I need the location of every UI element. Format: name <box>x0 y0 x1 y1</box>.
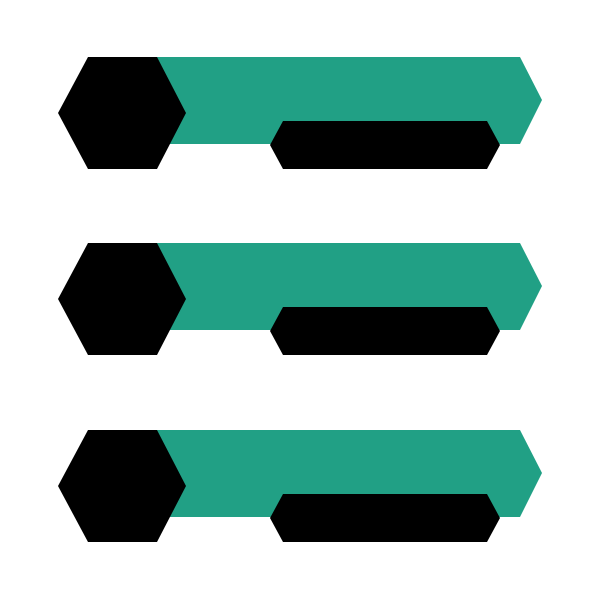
hexagon: row 1 <box>58 57 186 169</box>
bar: row 3 <box>270 494 500 542</box>
hexagon: row 3 <box>58 430 186 542</box>
bar: row 2 <box>270 307 500 355</box>
band: row 2 <box>150 243 542 330</box>
band: row 1 <box>150 57 542 144</box>
row 1 <box>58 57 542 169</box>
hexagon: row 2 <box>58 243 186 355</box>
bar: row 1 <box>270 121 500 169</box>
row 3 <box>58 430 542 542</box>
row 2 <box>58 243 542 355</box>
band: row 3 <box>150 430 542 517</box>
